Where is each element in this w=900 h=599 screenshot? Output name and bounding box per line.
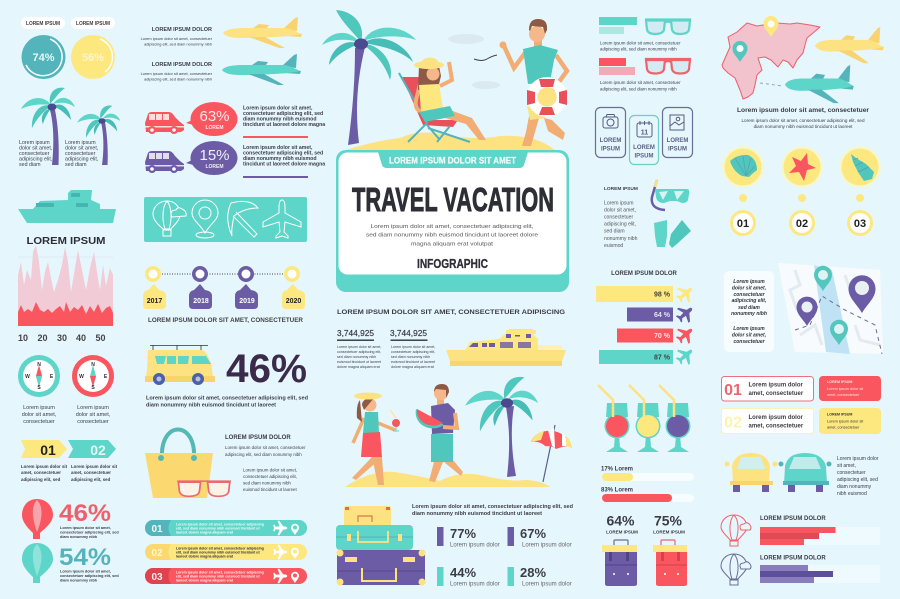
panel: snorkel and fins: sed diam: [604, 228, 625, 234]
panel: sunglasses with bars: Lorem ipsum dolor sit amet, consectetuer: [600, 40, 681, 46]
icon: teal pin: [732, 41, 748, 62]
panel: main title card: [336, 150, 569, 292]
panel: numbered notes: 02: [724, 414, 742, 432]
icon: map pin outline: [192, 200, 218, 238]
panel: compasses: S: [37, 385, 41, 391]
panel: numbered route bars: Lorem ipsum dolor sit amet, consectetuer adipiscing: [176, 570, 264, 574]
panel: compasses: E: [104, 374, 108, 380]
timeline 2017-2020: LOREM IPSUM DOLOR SIT AMET, CONSECTETUER: [148, 317, 303, 324]
panel: bag and glasses: euismod tincidunt ut laoreet: [243, 487, 297, 492]
panel: numbered notes: [722, 376, 881, 434]
icon: purple pin right: [848, 275, 876, 313]
panel: vans with speech bubbles: tincidunt ut laoreet dolore magna: [243, 122, 325, 128]
panel: percent circles: [21, 17, 115, 79]
panel: two number statistics: euismod tincidunt ut laoreet: [337, 360, 381, 364]
panel: two number statistics: Lorem ipsum dolor sit amet,: [391, 345, 435, 349]
area chart: 40: [76, 333, 86, 343]
panel: van 46 percent: 46%: [226, 347, 307, 391]
icon: stacked suitcases: [336, 506, 426, 586]
panel: two number statistics: dolore magna aliquam erat: [337, 365, 380, 369]
panel: two number statistics: sed diam nonummy nibh: [337, 355, 376, 359]
panel: palm trees with text: adipiscing elit,: [19, 156, 52, 162]
panel: vans with speech bubbles: consectetuer adipiscing elit, sed: [243, 111, 323, 117]
panel: numbered notes: amet, consectetuer: [748, 424, 804, 430]
panel: backpacks: LOREM IPSUM: [653, 530, 685, 534]
subtitle: LOREM IPSUM DOLOR SIT AMET: [389, 156, 516, 166]
panel: two number statistics: euismod tincidunt ut laoreet: [391, 360, 435, 364]
panel: percentages grid: Lorem ipsum dolor: [522, 582, 572, 588]
panel: two number statistics: consectetuer adipiscing elit,: [391, 350, 435, 354]
panel: balloon stats: Lorem ipsum dolor sit amet,: [60, 526, 111, 530]
panel: percent circles: 56%: [82, 52, 104, 64]
panel: planes with text: adipiscing elit, sed diam nonummy nibh: [144, 76, 212, 82]
panel: world map with planes: [722, 16, 884, 129]
panel: numbered route bars: laoreet dolore magna aliquam erat: [176, 530, 234, 534]
panel: numbered notes: amet, consectetuer: [748, 391, 804, 397]
panel: balloon stats: Lorem ipsum dolor sit amet,: [60, 570, 111, 574]
panel: map note card: dolor sit amet,: [732, 332, 766, 338]
panel: numbered route bars: elit, sed diam nonummy nibh euismod tincidunt ut: [176, 574, 260, 578]
panel: numbered notes: Lorem ipsum dolor: [748, 415, 804, 421]
panel: numbered route bars: laoreet dolore magna aliquam erat: [176, 578, 234, 582]
body text: sed diam nonummy nibh euismod tincidunt ut laoreet dolore: [366, 232, 538, 238]
panel: map note card: consectetuer: [733, 292, 766, 298]
body text: magna aliquam erat volutpat: [411, 242, 493, 248]
panel: percent circles: LOREM IPSUM: [76, 21, 110, 27]
panel: numbered notes: Lorem ipsum dolor sit: [827, 387, 864, 391]
panel: compasses: E: [50, 374, 54, 380]
panel: compasses: W: [25, 374, 30, 380]
panel: arrows 01 02: [21, 440, 118, 482]
panel: percentages grid: Lorem ipsum dolor: [450, 542, 500, 548]
panel: vans with speech bubbles: consectetuer adipiscing elit, sed: [243, 150, 323, 156]
panel: numbered route bars: 03: [151, 572, 163, 583]
panel: snorkel and fins: euismod: [604, 243, 623, 249]
panel: teal icon strip: [144, 197, 307, 242]
panel: percentages grid: 44%: [450, 565, 476, 580]
panel: percentages grid: Lorem ipsum dolor sit amet, consectetuer adipiscing elit, sed: [412, 504, 574, 510]
panel: compasses: dolor sit amet,: [22, 412, 57, 418]
illustration: beach scene bottom: [345, 377, 572, 487]
bar chart: percent bars with planes: LOREM IPSUM DOLOR: [611, 271, 677, 277]
panel: numbered route bars: elit, sed diam nonummy nibh euismod tincidunt ut: [176, 550, 260, 554]
panel: three icon cards: LOREM: [600, 138, 621, 144]
panel: map note card: dolor sit amet,: [732, 286, 766, 292]
icon: balloon outline: [153, 201, 186, 236]
panel: sunglasses with bars: [599, 17, 691, 92]
icon: teal pin top: [814, 266, 832, 291]
bar chart: percent bars with planes: [596, 271, 698, 368]
panel: snorkel and fins: Lorem ipsum: [604, 200, 633, 206]
panel: balloon stats: [22, 499, 119, 583]
panel: vans with speech bubbles: 63%: [199, 108, 230, 125]
panel: front-view cars: nibh euismod: [837, 491, 867, 497]
panel: compasses: Lorem ipsum: [23, 405, 55, 411]
area chart: 20: [38, 333, 48, 343]
panel: compasses: N: [91, 362, 95, 368]
panel: numbered notes: Lorem ipsum dolor sit: [827, 420, 864, 424]
panel: street map with pins: [778, 263, 883, 354]
illustration: woman sunbathing: [414, 58, 486, 140]
panel: three icon cards: IPSUM: [668, 146, 687, 152]
panel: front-view cars: diam nonummy: [837, 484, 872, 490]
panel: arrows 01 02: adipiscing elit, sed: [21, 477, 61, 482]
panel: numbered notes: Lorem ipsum dolor: [748, 382, 804, 388]
panel: backpacks: [602, 512, 687, 586]
panel: arrows 01 02: Lorem ipsum dolor sit: [71, 464, 118, 469]
panel: vans with speech bubbles: Lorem ipsum dolor sit amet,: [243, 106, 313, 112]
panel: balloon stats: 54%: [59, 544, 111, 571]
panel: two number statistics: [337, 328, 435, 369]
panel: bag and glasses: LOREM IPSUM DOLOR: [225, 435, 291, 441]
panel: palm trees with text: sed diam: [65, 162, 87, 168]
panel: three shells steps: 02: [796, 218, 808, 230]
infographic label: INFOGRAPHIC: [417, 256, 488, 271]
panel: front-view cars: adipiscing elit, sed: [837, 477, 878, 483]
panel: front-view cars: sit amet,: [837, 463, 856, 469]
panel: three shells steps: 03: [854, 218, 866, 230]
timeline 2017-2020: 2018: [193, 298, 209, 305]
panel: progress bars: 83% Lorem: [601, 488, 633, 494]
panel: bag and glasses: adipiscing elit, sed diam nonummy nibh: [225, 452, 302, 457]
panel: numbered notes: amet, consectetuer: [827, 426, 860, 430]
icon: yacht yellow: [446, 329, 566, 366]
area chart: LOREM IPSUM: [26, 235, 106, 247]
panel: numbered notes: amet, consectetuer: [827, 393, 860, 397]
panel: compasses: consectetuer: [23, 419, 55, 425]
icon: scallop shell: [730, 155, 757, 177]
panel: planes with text: adipiscing elit, sed diam nonummy nibh: [144, 42, 212, 46]
panel: percentages grid: diam nonummy nibh euismod tincidunt ut laoreet: [412, 511, 542, 517]
panel: snorkel and fins: adipiscing elit,: [604, 222, 636, 228]
panel: vans with speech bubbles: LOREM: [205, 164, 224, 170]
panel: palm trees with text: sed diam: [19, 162, 41, 168]
area chart: 10: [18, 333, 28, 343]
panel: three icon cards: 11: [641, 130, 648, 136]
icon: plane outline: [263, 200, 301, 238]
panel: sunglasses with bars: Lorem ipsum dolor sit amet, consectetuer: [600, 80, 681, 85]
panel: sunglasses with bars: adipiscing elit, sed diam nonummy nibh: [600, 86, 677, 92]
panel: arrows 01 02: adipiscing elit, sed: [71, 477, 111, 482]
panel: percentages grid: Lorem ipsum dolor: [450, 582, 500, 588]
panel: numbered notes: LOREM IPSUM: [827, 380, 852, 384]
panel: front-view cars: Lorem ipsum dolor: [837, 456, 879, 462]
icon: picture: [670, 115, 684, 130]
panel: numbered notes: LOREM IPSUM: [827, 412, 852, 416]
panel: progress bars: 17% Lorem: [601, 466, 633, 472]
panel: balloon stats: diam nonummy nibh: [60, 535, 98, 539]
panel: numbered route bars: Lorem ipsum dolor sit amet, consectetuer adipiscing: [176, 546, 264, 550]
area chart: 30: [57, 333, 67, 343]
icon: ship teal: [18, 190, 116, 223]
panel: snorkel and fins: consectetuer: [604, 214, 633, 220]
panel: percentages grid: [412, 504, 574, 588]
area chart: [18, 235, 113, 343]
panel: compasses: consectetuer: [77, 419, 109, 425]
illustration: beach scene top: [322, 10, 567, 150]
illustration: beach chair: [399, 73, 470, 142]
icon: yellow pin: [764, 16, 778, 37]
panel: bag and glasses: Lorem ipsum dolor sit amet,: [243, 468, 297, 472]
panel: palm trees with text: Lorem ipsum: [19, 140, 50, 146]
panel: arrows 01 02: amet, consectetuer: [21, 470, 61, 475]
panel: two number statistics: Lorem ipsum dolor sit amet,: [337, 345, 381, 349]
bar chart: percent bars with planes: 98 %: [654, 292, 671, 298]
panel: palm trees with text: adipiscing elit,: [65, 156, 98, 162]
panel: palm trees with text: consectetuer: [19, 151, 50, 157]
panel: vans with speech bubbles: tincidunt ut laoreet dolore magna: [243, 162, 325, 168]
panel: world map with planes: Lorem ipsum dolor sit amet, consectetuer: [737, 107, 870, 114]
timeline 2017-2020: 2017: [147, 298, 162, 305]
panel: backpacks: 64%: [606, 512, 635, 528]
panel: numbered route bars: elit, sed diam nonummy nibh euismod tincidunt ut: [176, 526, 260, 530]
panel: palm trees with text: Lorem ipsum: [65, 140, 96, 146]
panel: balloon stats: consectetuer adipiscing elit, sed: [60, 530, 119, 534]
panel: arrows 01 02: Lorem ipsum dolor sit: [21, 464, 68, 469]
panel: front-view cars: [724, 453, 879, 497]
panel: compasses: [18, 355, 114, 425]
bar chart: percent bars with planes: 87 %: [654, 354, 671, 362]
panel: arrows 01 02: amet, consectetuer: [71, 470, 111, 475]
panel: percent circles: 74%: [32, 52, 55, 64]
panel: palm trees with text: dolor sit amet,: [19, 146, 52, 152]
panel: vans with speech bubbles: LOREM: [205, 125, 224, 131]
panel: world map with planes: Lorem ipsum dolor sit amet, consectetuer adipiscing elit, sed: [741, 118, 865, 123]
panel: numbered route bars: 01: [151, 524, 163, 535]
panel: map note card: consectetuer: [733, 339, 766, 345]
panel: vans with speech bubbles: 15%: [199, 147, 230, 164]
panel: palm trees with text: dolor sit amet,: [65, 146, 98, 152]
panel: van 46 percent: [145, 345, 308, 408]
panel: world map with planes: diam nonummy nibh euismod tincidunt ut laoreet: [754, 124, 853, 129]
panel: outline balloons with bars: [721, 515, 880, 585]
panel: two number statistics: consectetuer adipiscing elit,: [337, 350, 381, 354]
panel: numbered route bars: [145, 520, 307, 584]
panel: numbered notes: 01: [724, 382, 742, 399]
panel: outline balloons with bars: LOREM IPSUM DOLOR: [760, 516, 826, 522]
panel: outline balloons with bars: LOREM IPSUM DOLOR: [760, 556, 826, 562]
panel: front-view cars: consectetuer: [837, 470, 866, 476]
panel: percentages grid: Lorem ipsum dolor: [522, 542, 572, 548]
panel: compasses: N: [37, 362, 41, 368]
panel: three icon cards: IPSUM: [634, 154, 654, 160]
panel: three icon cards: [596, 108, 692, 164]
panel: palm trees with text: consectetuer: [65, 151, 96, 157]
panel: two number statistics: 3,744,925: [337, 328, 374, 338]
panel: map note card: Lorem ipsum: [733, 326, 765, 332]
panel: van 46 percent: Lorem ipsum dolor sit amet, consectetuer adipiscing elit, sed: [146, 396, 308, 402]
icon: camera: [603, 114, 618, 128]
panel: numbered route bars: 02: [151, 548, 163, 559]
panel: numbered route bars: Lorem ipsum dolor sit amet, consectetuer adipiscing: [176, 522, 264, 526]
panel: map note card: sed diam: [738, 305, 760, 311]
bar chart: percent bars with planes: 70 %: [654, 333, 671, 340]
panel: three icon cards: IPSUM: [601, 146, 620, 152]
panel: snorkel and fins: [604, 180, 691, 249]
icon: purple pin left: [796, 297, 818, 326]
panel: vans with speech bubbles: diam nonummy nibh euismod: [243, 116, 316, 122]
panel: balloon stats: diam nonummy nibh: [60, 578, 98, 582]
panel: planes with text: Lorem ipsum dolor sit amet, consectetuer: [141, 36, 213, 41]
bar chart: percent bars with planes: 64 %: [654, 312, 671, 319]
panel: two number statistics: dolore magna aliquam erat: [391, 365, 434, 369]
panel: cocktails: [598, 385, 690, 452]
panel: arrows 01 02: 01: [40, 442, 56, 458]
panel: numbered route bars: laoreet dolore magna aliquam erat: [176, 554, 234, 558]
panel: three icon cards: LOREM: [667, 138, 688, 144]
icon: starfish: [789, 153, 816, 181]
panel: vans with speech bubbles: diam nonummy nibh euismod: [243, 156, 316, 162]
panel: planes with text: Lorem ipsum dolor sit amet, consectetuer: [141, 71, 213, 76]
panel: vans with speech bubbles: Lorem ipsum dolor sit amet,: [243, 145, 313, 151]
panel: sunglasses with bars: adipiscing elit, sed diam nonummy nibh: [600, 46, 677, 52]
panel: progress bars: [601, 466, 694, 502]
panel: compasses: Lorem ipsum: [77, 405, 109, 411]
timeline 2017-2020: 2020: [286, 298, 301, 305]
panel: planes with text: LOREM IPSUM DOLOR: [152, 62, 212, 68]
icon: calendar: [637, 121, 652, 137]
timeline 2017-2020: [143, 266, 305, 324]
panel: van 46 percent: diam nonummy nibh euismod tincidunt ut laoreet: [146, 402, 276, 408]
panel: snorkel and fins: dolor sit amet,: [604, 208, 636, 214]
panel: two number statistics: sed diam nonummy nibh: [391, 355, 430, 359]
icon: beach umbrella: [531, 425, 572, 482]
panel: vans with speech bubbles: [145, 102, 325, 178]
panel: percentages grid: 28%: [520, 565, 546, 580]
panel: three shells steps: 01: [737, 218, 749, 230]
panel: percentages grid: 77%: [450, 526, 476, 541]
panel: palm trees with text: [19, 88, 120, 168]
panel: compasses: S: [91, 385, 95, 391]
heading: middle section: LOREM IPSUM DOLOR SIT AMET, CONSECTETUER ADIPISCING: [337, 309, 565, 316]
panel: snorkel and fins: LOREM IPSUM: [604, 186, 638, 192]
panel: bag and glasses: [145, 430, 306, 498]
panel: percent circles: LOREM IPSUM: [26, 21, 60, 27]
illustration: woman with drink: [352, 392, 400, 485]
panel: balloon stats: consectetuer adipiscing elit, sed: [60, 574, 119, 578]
panel: percentages grid: 67%: [520, 526, 546, 541]
body text: Lorem ipsum dolor sit amet, consectetuer adipiscing elit,: [370, 224, 534, 230]
panel: planes with text: LOREM IPSUM DOLOR: [152, 27, 212, 33]
panel: map note card: [724, 271, 774, 352]
panel: snorkel and fins: nonummy nibh: [604, 236, 638, 242]
panel: three shells steps: [722, 146, 881, 236]
panel: planes with text: [141, 17, 302, 85]
icon: conch shell: [851, 154, 874, 181]
panel: compasses: W: [79, 374, 84, 380]
panel: bag and glasses: sed diam nonummy nibh: [243, 480, 291, 486]
panel: backpacks: LOREM IPSUM: [606, 530, 638, 534]
illustration: man with life ring: [500, 19, 567, 146]
panel: compasses: dolor sit amet,: [76, 412, 111, 418]
panel: bag and glasses: Lorem ipsum dolor sit amet, consectetuer: [225, 445, 306, 450]
panel: backpacks: 75%: [654, 512, 683, 528]
panel: balloon stats: 46%: [59, 500, 111, 527]
illustration: man with watermelon: [416, 384, 463, 482]
timeline 2017-2020: 2019: [239, 298, 255, 305]
panel: map note card: nonummy nibh: [731, 311, 767, 317]
title: TRAVEL VACATION: [352, 181, 554, 218]
panel: bag and glasses: consectetuer adipiscing elit,: [243, 474, 297, 479]
area chart: 50: [96, 333, 106, 343]
panel: map note card: Lorem ipsum: [733, 279, 765, 285]
panel: two number statistics: 3,744,925: [390, 328, 427, 338]
panel: arrows 01 02: 02: [90, 442, 106, 458]
panel: three icon cards: LOREM: [633, 145, 655, 151]
icon: teal pin bottom: [830, 320, 848, 345]
icon: umbrella outline: [228, 201, 258, 237]
panel: map note card: adipiscing elit,: [732, 298, 766, 304]
